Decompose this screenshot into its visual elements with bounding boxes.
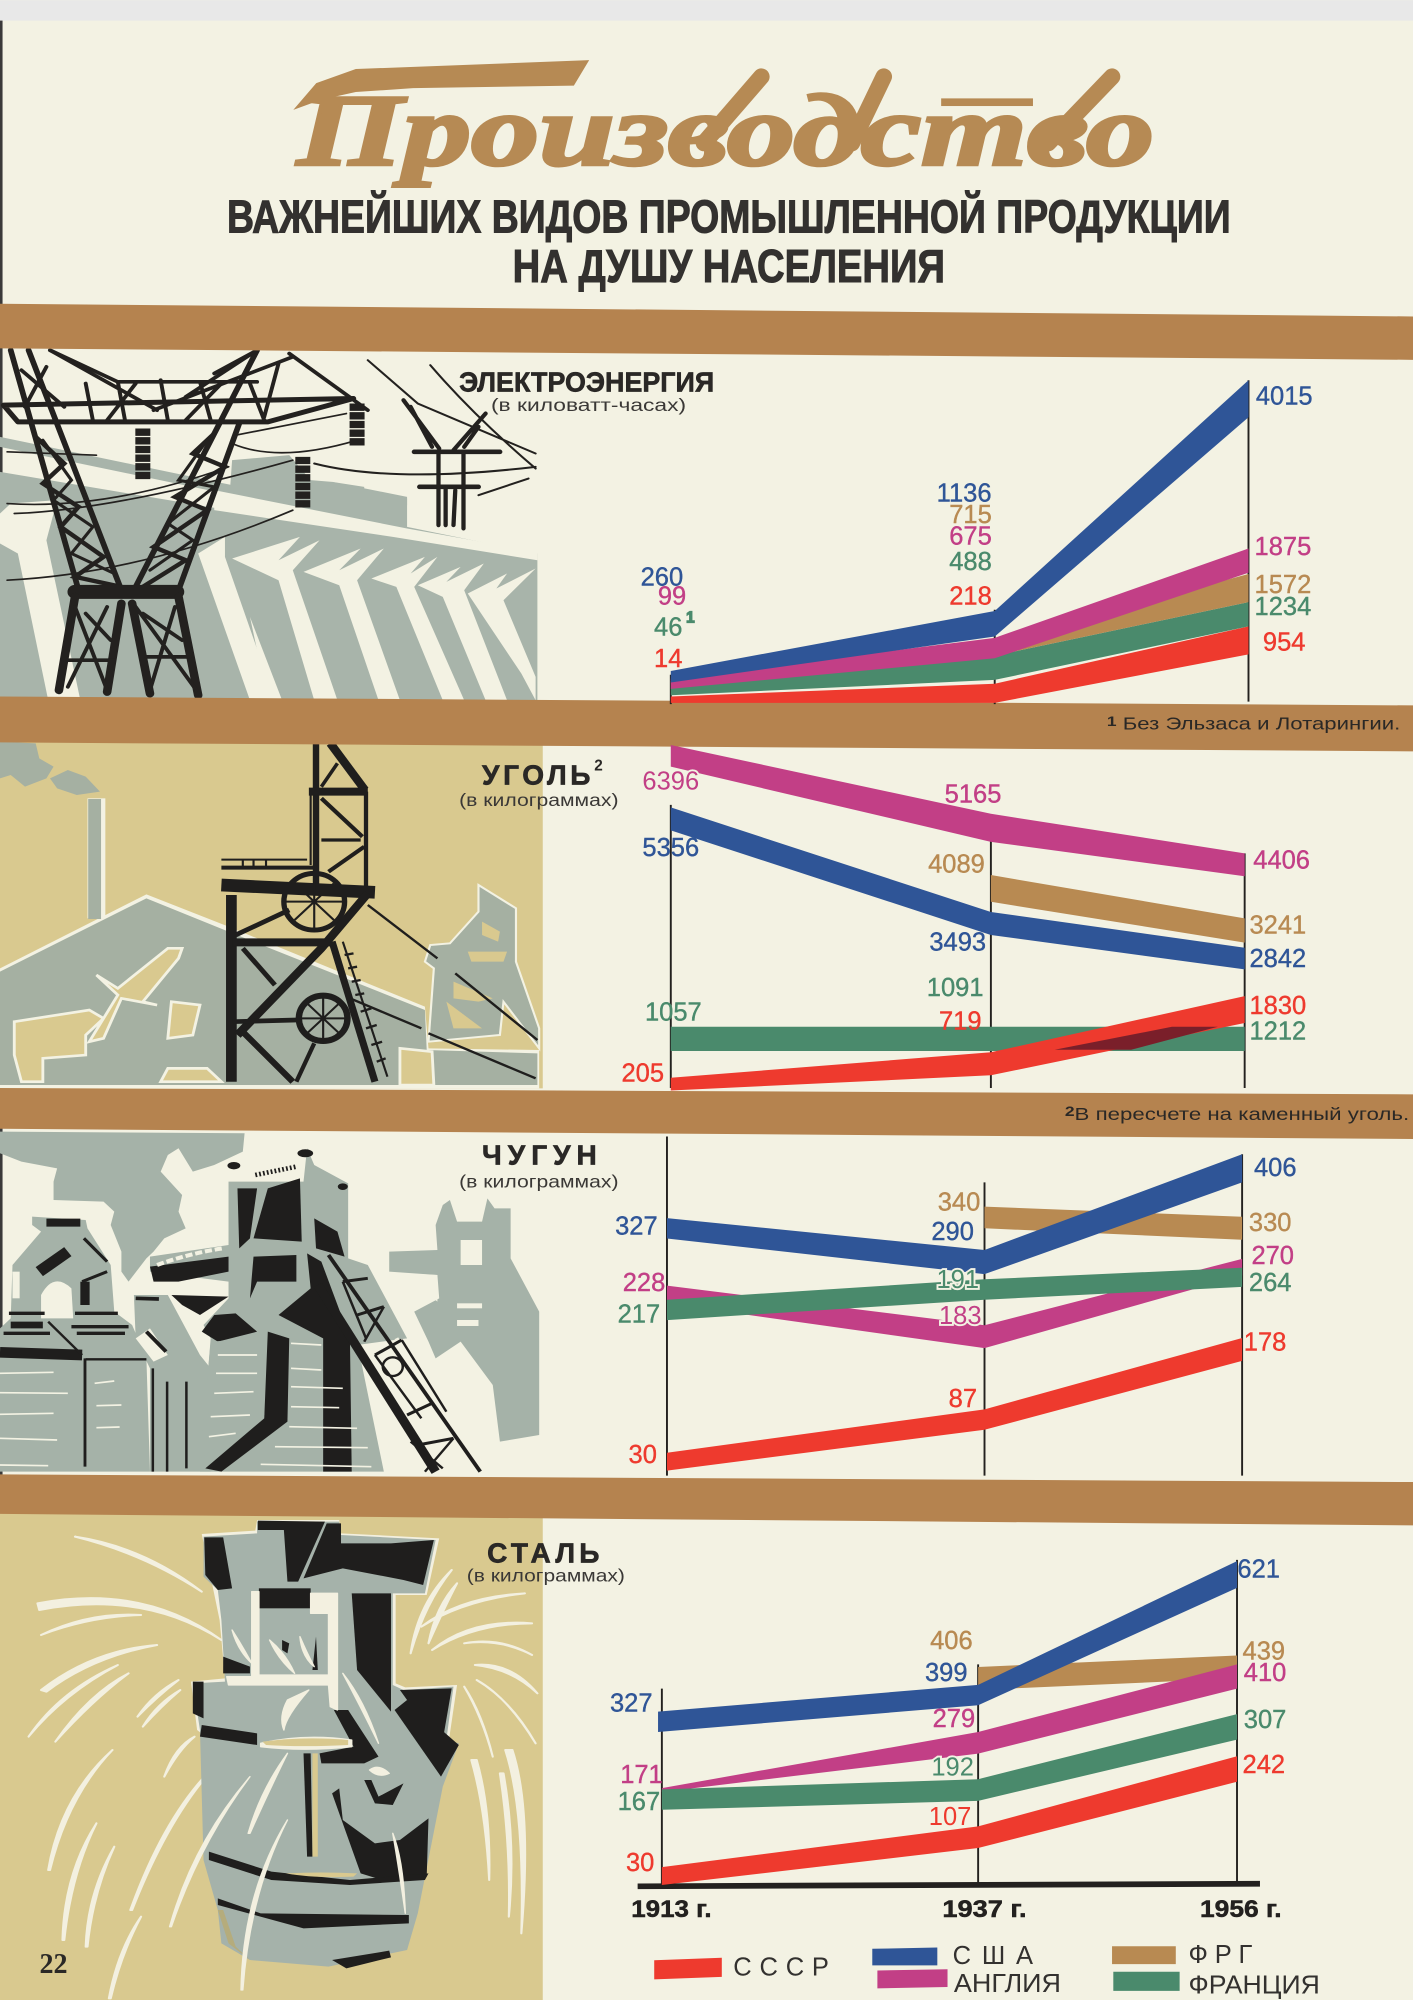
legend: ФРГ: [1189, 1941, 1253, 1969]
chart: coal: [459, 745, 1310, 1091]
values: electricity: 715: [949, 501, 992, 529]
values: coal: 5356: [642, 834, 699, 862]
values: coal: 1091: [927, 974, 984, 1002]
values: steel: 621: [1237, 1556, 1280, 1584]
legend: [654, 1941, 1320, 1999]
illustration: power line tower and dam: [0, 350, 537, 700]
values: steel: 410: [1244, 1659, 1286, 1687]
values: electricity: 1234: [1255, 593, 1311, 621]
heading: coal: [459, 757, 619, 810]
values: pig iron: 87: [949, 1385, 977, 1413]
values: pig iron: 30: [629, 1441, 657, 1469]
values: electricity: [641, 382, 1313, 673]
footnote 2: В пересчете на каменный уголь.: [1075, 1104, 1409, 1124]
legend: СССР: [733, 1954, 829, 1982]
chart: pig iron: [459, 1136, 1297, 1476]
values: steel: 399: [925, 1659, 968, 1687]
heading: coal: 2: [594, 757, 603, 774]
heading: electricity: (в киловатт-часах): [491, 395, 686, 415]
values: coal: 4089: [928, 850, 985, 878]
values: electricity: 1: [686, 610, 695, 627]
values: coal: 3241: [1249, 912, 1306, 940]
values: steel: 327: [610, 1690, 653, 1718]
values: steel: 307: [1244, 1706, 1286, 1734]
illustration: coal mine headframe: [0, 735, 543, 1088]
title: Производство: [296, 75, 1154, 188]
values: coal: 6396: [642, 768, 699, 796]
heading: electricity: ЭЛЕКТРОЭНЕРГИЯ: [459, 367, 714, 398]
values: coal: [621, 768, 1310, 1088]
brown bands: [0, 304, 1413, 1525]
footnote 1: Без Эльзаса и Лотарингии.: [1117, 714, 1400, 734]
values: steel: 279: [933, 1705, 975, 1733]
year labels: [631, 1896, 1282, 1923]
heading: steel: СТАЛЬ: [487, 1537, 599, 1568]
values: coal: 4406: [1253, 847, 1310, 875]
values: coal: 1057: [645, 998, 702, 1026]
footnote 2: 2: [1065, 1103, 1075, 1119]
values: electricity: 1875: [1255, 533, 1311, 561]
values: coal: 719: [939, 1007, 982, 1035]
values: electricity: 99: [658, 583, 686, 611]
values: electricity: 488: [949, 548, 992, 576]
heading: steel: [467, 1537, 625, 1586]
illustration: blast furnace: [0, 1132, 539, 1472]
illustration: steel ladle with sparks: [0, 1510, 543, 2000]
values: steel: 107: [929, 1803, 971, 1831]
values: pig iron: [615, 1154, 1297, 1469]
ladle body: [191, 1520, 457, 1743]
values: steel: 167: [618, 1788, 660, 1816]
year labels: 1956 г.: [1200, 1896, 1282, 1923]
legend: США: [953, 1942, 1033, 1970]
values: electricity: 1136: [937, 479, 992, 507]
values: coal: 1830: [1249, 992, 1306, 1020]
values: coal: 5165: [945, 780, 1001, 808]
values: pig iron: 228: [623, 1269, 665, 1297]
values: coal: 3493: [929, 928, 986, 956]
subtitle: [227, 190, 1231, 292]
legend: АНГЛИЯ: [954, 1970, 1061, 1998]
values: electricity: 4015: [1256, 382, 1313, 410]
values: pig iron: 191: [936, 1266, 979, 1294]
values: pig iron: 178: [1244, 1329, 1286, 1357]
values: electricity: 218: [949, 583, 992, 611]
values: pig iron: 264: [1249, 1269, 1291, 1297]
heading: pig iron: (в килограммах): [459, 1171, 619, 1191]
footnote 1: 1: [1107, 713, 1117, 729]
legend: ФРАНЦИЯ: [1189, 1971, 1320, 1999]
values: steel: 406: [930, 1627, 973, 1655]
values: pig iron: 290: [931, 1218, 974, 1246]
chart: electricity: [459, 367, 1313, 704]
title: [293, 60, 1154, 188]
values: coal: 205: [621, 1060, 664, 1088]
page number: 22: [40, 1949, 68, 1980]
values: electricity: 1572: [1255, 571, 1311, 599]
heading: coal: (в килограммах): [459, 790, 619, 810]
values: pig iron: 270: [1251, 1242, 1294, 1270]
white highlights on ladle: [170, 1592, 405, 1990]
heading: electricity: [459, 367, 714, 415]
values: pig iron: 330: [1249, 1209, 1291, 1237]
heading: pig iron: ЧУГУН: [482, 1140, 597, 1171]
values: electricity: 46: [654, 613, 682, 641]
values: electricity: 260: [641, 564, 683, 592]
values: steel: 30: [626, 1849, 654, 1877]
year labels: 1913 г.: [631, 1896, 712, 1923]
chart: steel: [467, 1537, 1286, 1923]
heading: steel: (в килограммах): [467, 1566, 625, 1586]
values: pig iron: 183: [939, 1302, 982, 1330]
heading: pig iron: [459, 1140, 619, 1191]
subtitle: НА ДУШУ НАСЕЛЕНИЯ: [513, 240, 945, 292]
values: steel: 242: [1243, 1751, 1285, 1779]
year labels: 1937 г.: [942, 1896, 1027, 1923]
values: steel: [610, 1556, 1286, 1877]
values: steel: 171: [620, 1761, 663, 1789]
values: electricity: 14: [654, 645, 682, 673]
heading: coal: УГОЛЬ: [482, 759, 590, 790]
values: pig iron: 406: [1254, 1154, 1297, 1182]
sparks: [29, 1537, 537, 1998]
values: electricity: 675: [949, 523, 992, 551]
values: pig iron: 340: [938, 1188, 980, 1216]
values: electricity: 954: [1263, 629, 1305, 657]
values: coal: 2842: [1249, 945, 1306, 973]
values: coal: 1212: [1249, 1018, 1306, 1046]
values: pig iron: 217: [618, 1301, 660, 1329]
values: steel: 192: [931, 1753, 974, 1781]
values: steel: 439: [1243, 1637, 1285, 1665]
values: pig iron: 327: [615, 1213, 658, 1241]
